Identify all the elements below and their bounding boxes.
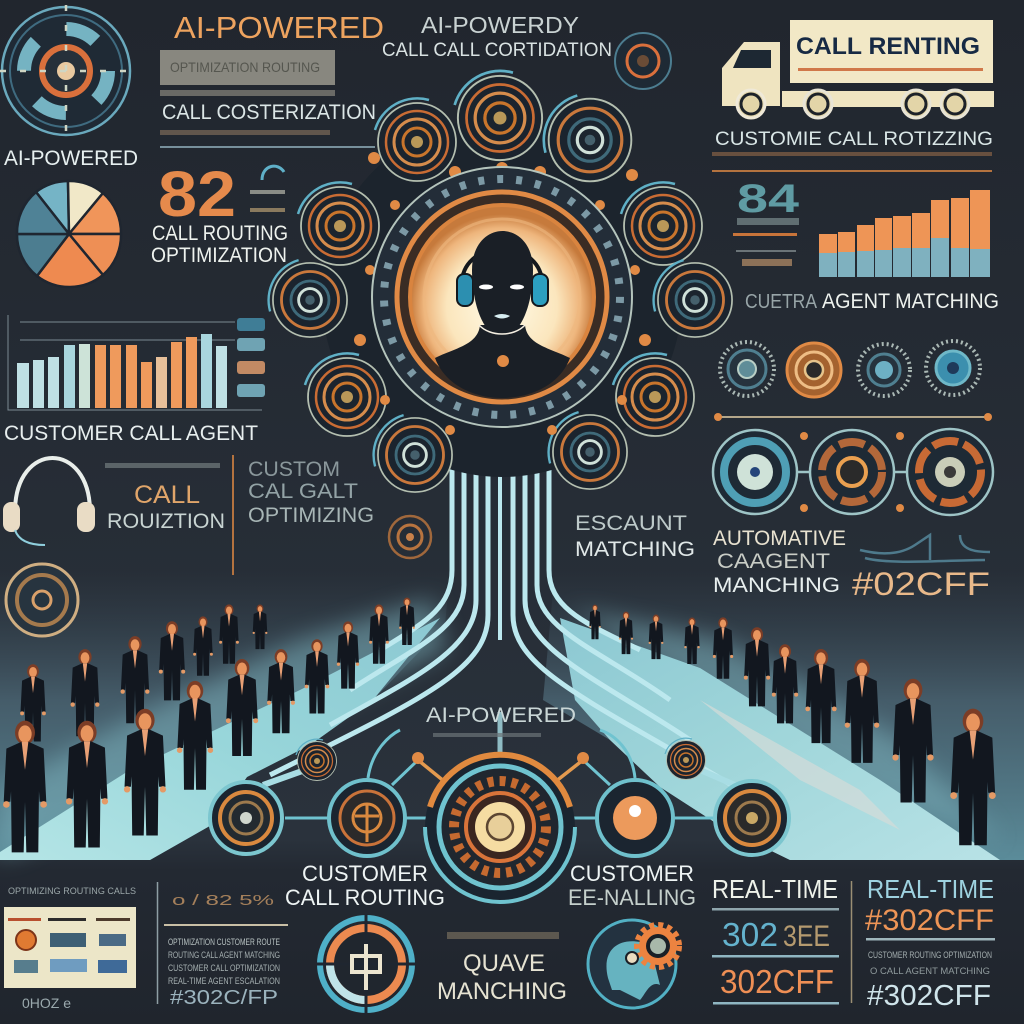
left bar chart [8,315,265,410]
label: AI-Powered left: AI-POWERED [4,147,138,170]
stats column: Real-Time: 3EE [783,920,830,953]
label: Call Routization [105,463,225,533]
dial mixed [907,429,993,515]
icon: head with gear [588,920,679,1008]
node left [329,780,405,856]
left spiral badge [6,564,78,636]
label: Customer Call Routing: CALL ROUTING [285,885,445,910]
small node beside heading [615,33,671,89]
small top-right node [665,738,706,780]
agent silhouette with headset [435,231,570,398]
label: Customer Be-Nalling: CUSTOMER [570,861,694,886]
orange divider [712,152,992,172]
bottom left text block: ROUTING CALL AGENT MATCHING [168,950,280,960]
bottom left card: OPTIMIZING ROUTING CALLS [8,886,136,896]
chart legend chips [237,318,265,331]
glowing core [397,192,607,402]
label: Automative Agent Manching [713,527,846,597]
stats column: Real-Time: 302 [722,916,778,953]
stats column: Real-Time code: REAL-TIME [867,874,994,904]
label: Custom Agent Matching [745,290,999,313]
satellite node: left upper [298,182,379,265]
fine print under lower heading [433,733,541,737]
satellite node: right [654,260,732,337]
label: Customer Call Rotizing: CUSTOMIE CALL ROTIZZING [715,129,993,150]
stats column: Real-Time code [865,874,995,1012]
fine print with divider [160,130,375,148]
small icon beside 82 [250,166,285,212]
number 84 panel [733,177,800,266]
label: Automative Agent Manching: CAAGENT [717,550,830,573]
code label: #02CFF: #02CFF [852,566,990,602]
satellite node: upper left [375,98,456,181]
lower hub network [210,712,789,902]
label: Call Routization: ROUIZTION [107,510,225,533]
stats column: Real-Time [712,874,839,1004]
truck label: CALL RENTING [796,33,980,60]
outer dial ring [372,167,632,427]
label: Call Routization: CALL [134,481,200,509]
stats column: Real-Time: REAL-TIME [712,874,838,904]
right stacked bar chart [819,190,990,277]
dial four [926,341,980,395]
bottom left text block: #302C/FP [170,987,278,1009]
vertical divider [850,881,852,1003]
faint sketch above code [860,535,990,562]
bottom left text block [164,892,288,1009]
label: Escalint Matching: ESCAUNT [575,512,687,535]
lit backdrop behind crowds [0,570,1024,860]
big number 82: 82 [158,158,236,230]
label: Quave Manching: MANCHING [437,978,567,1005]
bottom left text block: REAL-TIME AGENT ESCALATION [168,976,280,986]
top-left radial icon [0,5,132,137]
dial orange [810,430,894,514]
title: AI-Powered centre: AI-POWERDY [421,12,579,38]
label: Custom Cal Galt Optimizing: CAL GALT [248,480,358,503]
label: Automative Agent Manching: AUTOMATIVE [713,527,846,550]
bottom left text block: OPTIMIZATION CUSTOMER ROUTE [168,937,280,947]
satellite node: bottom left [374,415,452,492]
headset icon [3,458,95,545]
card caption: 0HOZ e [22,995,71,1011]
vertical divider [232,455,234,575]
pie chart [17,181,121,287]
satellite node: lower left [305,353,386,436]
number 84 panel: 84 [737,177,800,221]
label: Call Costerization: CALL COSTERIZATION [162,101,376,124]
vertical divider [156,882,158,1004]
label: Call Routing Optimization: CALL ROUTING [152,222,288,245]
satellite node: bottom right [549,412,627,489]
small top-left node [296,739,336,780]
orange connector dots [354,152,651,435]
dial two [787,343,841,397]
satellite node: upper right [544,95,631,181]
label line two: OPTIMIZATION [151,244,287,267]
stats column: Real-Time: 302CFF [720,963,834,1000]
connector lines [263,712,735,818]
label: Customer Be-Nalling: EE-NALLING [568,885,696,910]
node right [597,780,673,856]
badge: routing figure [316,914,416,1014]
central hub [269,71,732,492]
label: Customer Be-Nalling [568,861,696,910]
label: Escalint Matching: MATCHING [575,538,695,561]
label: Custom Cal Galt Optimizing: OPTIMIZING [248,504,374,527]
crowd: left agents [3,598,415,852]
dark crown backing [322,117,682,477]
satellite node: left [269,260,347,337]
connector dots [412,752,424,764]
label: Custom Agent Matching: CUETRA [745,291,818,313]
title: Call Call Cortidation: CALL CALL CORTIDATION [382,40,612,61]
label: Quave Manching: QUAVE [463,950,545,977]
label: Customer Call Routing: CUSTOMER [302,861,428,886]
row of three large dials [713,429,993,515]
floor light paths [0,618,1000,860]
stats column: Real-Time code: O CALL AGENT MATCHING [870,966,990,976]
label: Quave Manching [437,932,567,1005]
label: Escalint Matching [575,512,695,561]
label: Custom Agent Matching: AGENT MATCHING [822,290,999,313]
connector streams from agent to floor [270,400,740,790]
stats column: Real-Time code: #302CFF [865,904,994,937]
satellite node: top [455,71,542,160]
title: AI-Powered top: AI-POWERED [174,10,384,45]
heading: AI-Powered lower: AI-POWERED [426,704,576,727]
label: Customer Call Agent: CUSTOMER CALL AGENT [4,422,258,445]
bottom left card [4,886,136,1011]
truck icon [722,20,994,118]
node far right [715,781,789,855]
grey banner: OPTIMIZATION ROUTING [170,59,320,75]
row of four small dials [720,341,980,397]
dial teal [713,430,797,514]
bottom left text block: CUSTOMER CALL OPTIMIZATION [168,963,280,973]
small spiral icon [389,516,431,558]
dial one [720,342,774,396]
label: Custom Cal Galt Optimizing [248,458,374,527]
central lower node [425,752,575,902]
label: Custom Cal Galt Optimizing: CUSTOM [248,458,340,481]
bottom left text block: o / 82 5% [172,892,274,909]
grey banner [160,50,335,96]
label: Automative Agent Manching: MANCHING [713,574,840,597]
label: Customer Call Routing [285,861,445,910]
separator with end dots [714,413,992,421]
satellite node: right upper [621,182,702,265]
dial three [858,344,910,396]
satellite node: lower right [613,353,694,436]
stats column: Real-Time code: #302CFF [867,980,991,1012]
crowd: right agents [589,605,996,845]
node far left [210,782,282,854]
